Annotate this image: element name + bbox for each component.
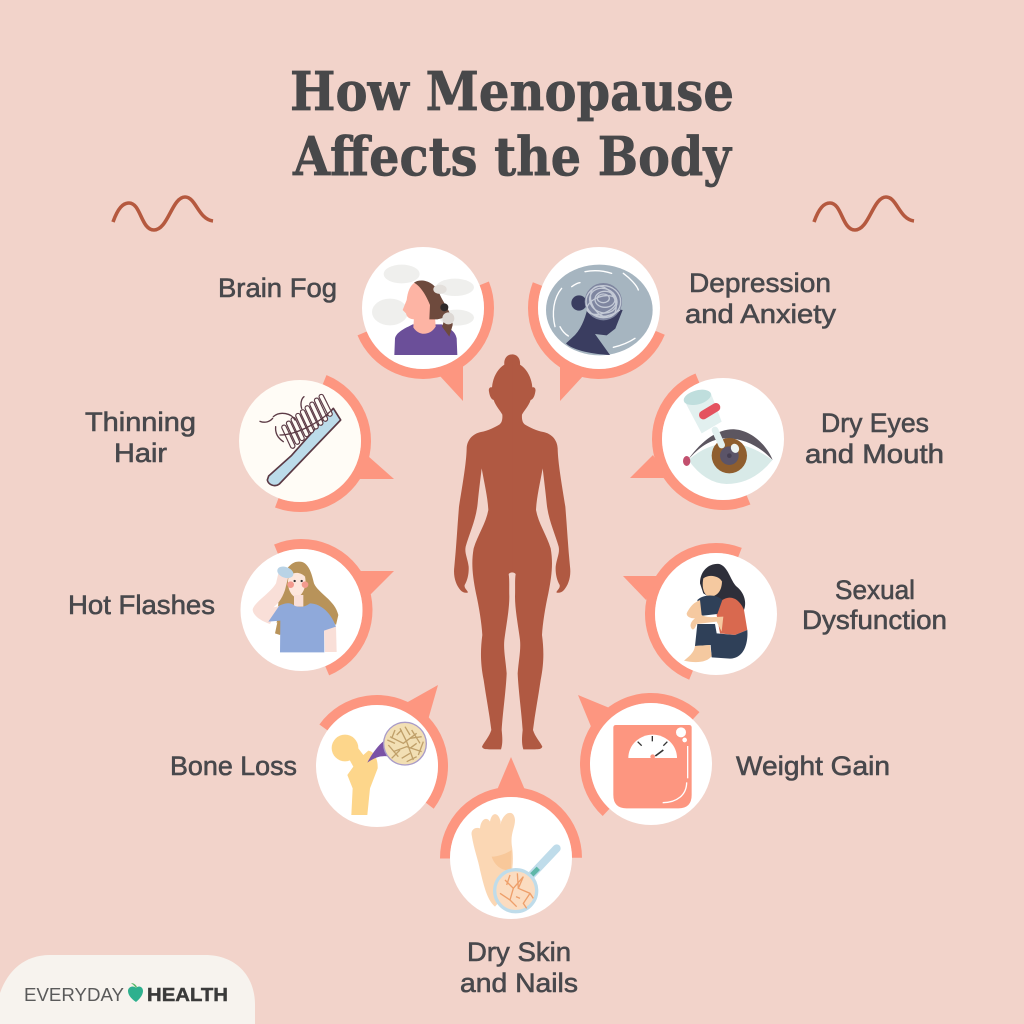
- callout ring: [630, 353, 809, 525]
- logo wordmark: HEALTH: [147, 985, 228, 1005]
- callout ring: [285, 674, 469, 858]
- logo wordmark: [24, 985, 228, 1005]
- icon: femur with magnified bone: [332, 722, 426, 815]
- panel: brain fog: [218, 222, 509, 401]
- label: [802, 575, 947, 635]
- label: Hot Flashes: [68, 590, 215, 620]
- label: Dry Skin: [467, 937, 571, 967]
- label: [805, 408, 944, 469]
- squiggle right: [814, 197, 914, 230]
- label: Hair: [114, 438, 167, 468]
- icon: foot with magnifier: [472, 813, 557, 912]
- label: [85, 407, 196, 468]
- callout ring: [445, 757, 577, 924]
- icon: woman wiping forehead: [253, 562, 338, 652]
- title: How Menopause: [290, 61, 734, 123]
- title: Affects the Body: [292, 126, 733, 188]
- label: [460, 937, 578, 998]
- label: Sexual: [835, 575, 915, 605]
- label: Bone Loss: [170, 751, 297, 781]
- panel: dry eyes and mouth: [630, 353, 944, 525]
- icon: bathroom scale: [613, 725, 692, 808]
- panel: bone loss: [170, 674, 469, 858]
- panel: hot flashes: [68, 524, 394, 696]
- title: [290, 61, 734, 188]
- callout ring: [558, 671, 744, 857]
- label: and Anxiety: [685, 299, 837, 329]
- panel: depression and anxiety: [513, 222, 837, 401]
- icon: apple heart: [128, 983, 143, 1002]
- label: Dysfunction: [802, 605, 947, 635]
- callout ring: [214, 355, 394, 527]
- callout ring: [337, 222, 509, 401]
- callout ring: [215, 524, 394, 696]
- icon: eye with eye drops: [682, 387, 773, 484]
- label: Dry Eyes: [821, 408, 929, 438]
- callout ring: [623, 528, 802, 700]
- panel: dry skin and nails: [445, 757, 578, 998]
- panel: thinning hair: [85, 355, 394, 527]
- icon: comb with hair: [260, 397, 341, 486]
- panel: weight gain: [558, 671, 890, 857]
- label: and Mouth: [805, 439, 944, 469]
- label: and Nails: [460, 968, 578, 998]
- logo panel: [0, 955, 255, 1024]
- label: [685, 268, 837, 329]
- panel: sexual dysfunction: [623, 528, 947, 700]
- icon: woman with fog: [372, 265, 474, 355]
- logo wordmark: EVERYDAY: [24, 985, 124, 1005]
- callout ring: [513, 222, 685, 401]
- label: Weight Gain: [736, 751, 890, 781]
- label: Brain Fog: [218, 273, 337, 303]
- label: Thinning: [85, 407, 196, 437]
- central body silhouette: [454, 354, 570, 749]
- icon: woman hugging knees: [684, 564, 747, 662]
- icon: head with tangled thoughts: [546, 265, 653, 355]
- squiggle left: [113, 197, 213, 230]
- label: Depression: [689, 268, 831, 298]
